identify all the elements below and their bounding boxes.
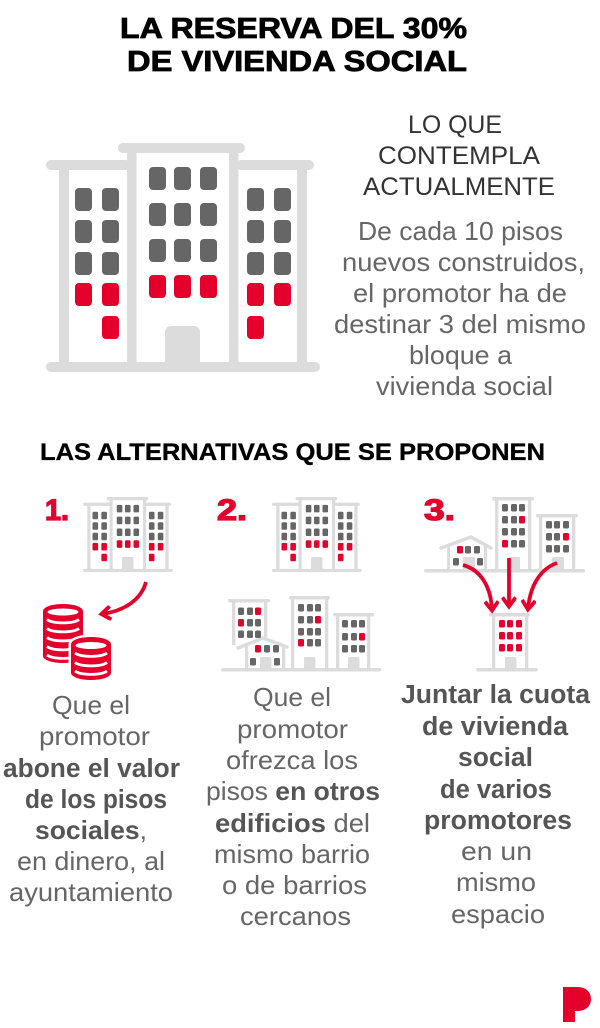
text block: option 2: ofrezca los [226,745,358,775]
text block: option 1: abone el valor [3,755,180,783]
icon: neighbourhood buildings [221,596,381,672]
title: DE VIVIENDA SOCIAL [127,46,467,78]
text block: current rule: destinar 3 del mismo [334,309,586,339]
icon: building [272,497,362,572]
text block: option 2: Que el [253,682,331,712]
panel: alternative 1 [3,494,180,907]
text block: option 3: social [458,744,533,772]
text block: option 1 [3,690,180,907]
text block: option 3: en un [461,836,532,866]
arrow: building to coins [102,582,146,614]
panel: alternative 3 [401,494,591,929]
text block: option 3 [401,681,591,929]
text block: option 2 [206,682,380,931]
icon: coin stacks [43,604,111,680]
number 2: 2. [217,494,247,527]
panel: alternative 2 [206,494,381,931]
icon: source buildings [424,497,585,572]
title: LA RESERVA DEL 30% [120,13,467,45]
text block: option 2: promotor [237,714,348,744]
text block: option 2: edificios del [215,808,370,838]
arrows: quota gathered into one building [463,558,557,610]
heading: alternatives: LAS ALTERNATIVAS QUE SE PROPONEN [40,439,545,466]
icon: main building with red social flats [46,143,320,372]
icon: publisher P logo [563,987,591,1022]
text block: option 1: ayuntamiento [9,877,173,907]
text block: option 3: espacio [451,899,545,929]
text block: option 3: Juntar la cuota [401,681,591,709]
text block: option 2: o de barrios [222,870,367,900]
icon: destination building [476,613,538,672]
text block: option 3: de vivienda [422,713,569,741]
text block: option 3: mismo [456,867,536,897]
icon: building [83,497,173,572]
heading: lo que contempla actualmente: CONTEMPLA [378,142,540,170]
text block: option 1: promotor [39,721,150,751]
number 1: 1. [45,494,69,527]
text block: current rule: bloque a [409,340,513,370]
heading: lo que contempla actualmente: LO QUE [408,111,502,139]
text block: option 1: en dinero, al [17,846,165,876]
text block: option 1: sociales, [35,815,147,845]
text block: option 2: pisos en otros [206,776,380,806]
heading: lo que contempla actualmente: ACTUALMENTE [363,173,555,201]
title [120,13,467,78]
text block: option 1: de los pisos [25,786,167,814]
text block: option 3: promotores [424,807,572,835]
text block: option 2: cercanos [240,901,351,931]
text block: option 1: Que el [52,690,130,720]
text block: current rule: nuevos construidos, [342,247,585,277]
text block: option 2: mismo barrio [214,839,370,869]
text block: current rule: De cada 10 pisos [358,216,563,246]
heading: lo que contempla actualmente [363,111,555,201]
text block: current rule [334,216,586,401]
text block: option 3: de varios [440,776,552,804]
text block: current rule: vivienda social [376,371,553,401]
number 3: 3. [424,494,455,527]
text block: current rule: el promotor ha de [353,278,567,308]
